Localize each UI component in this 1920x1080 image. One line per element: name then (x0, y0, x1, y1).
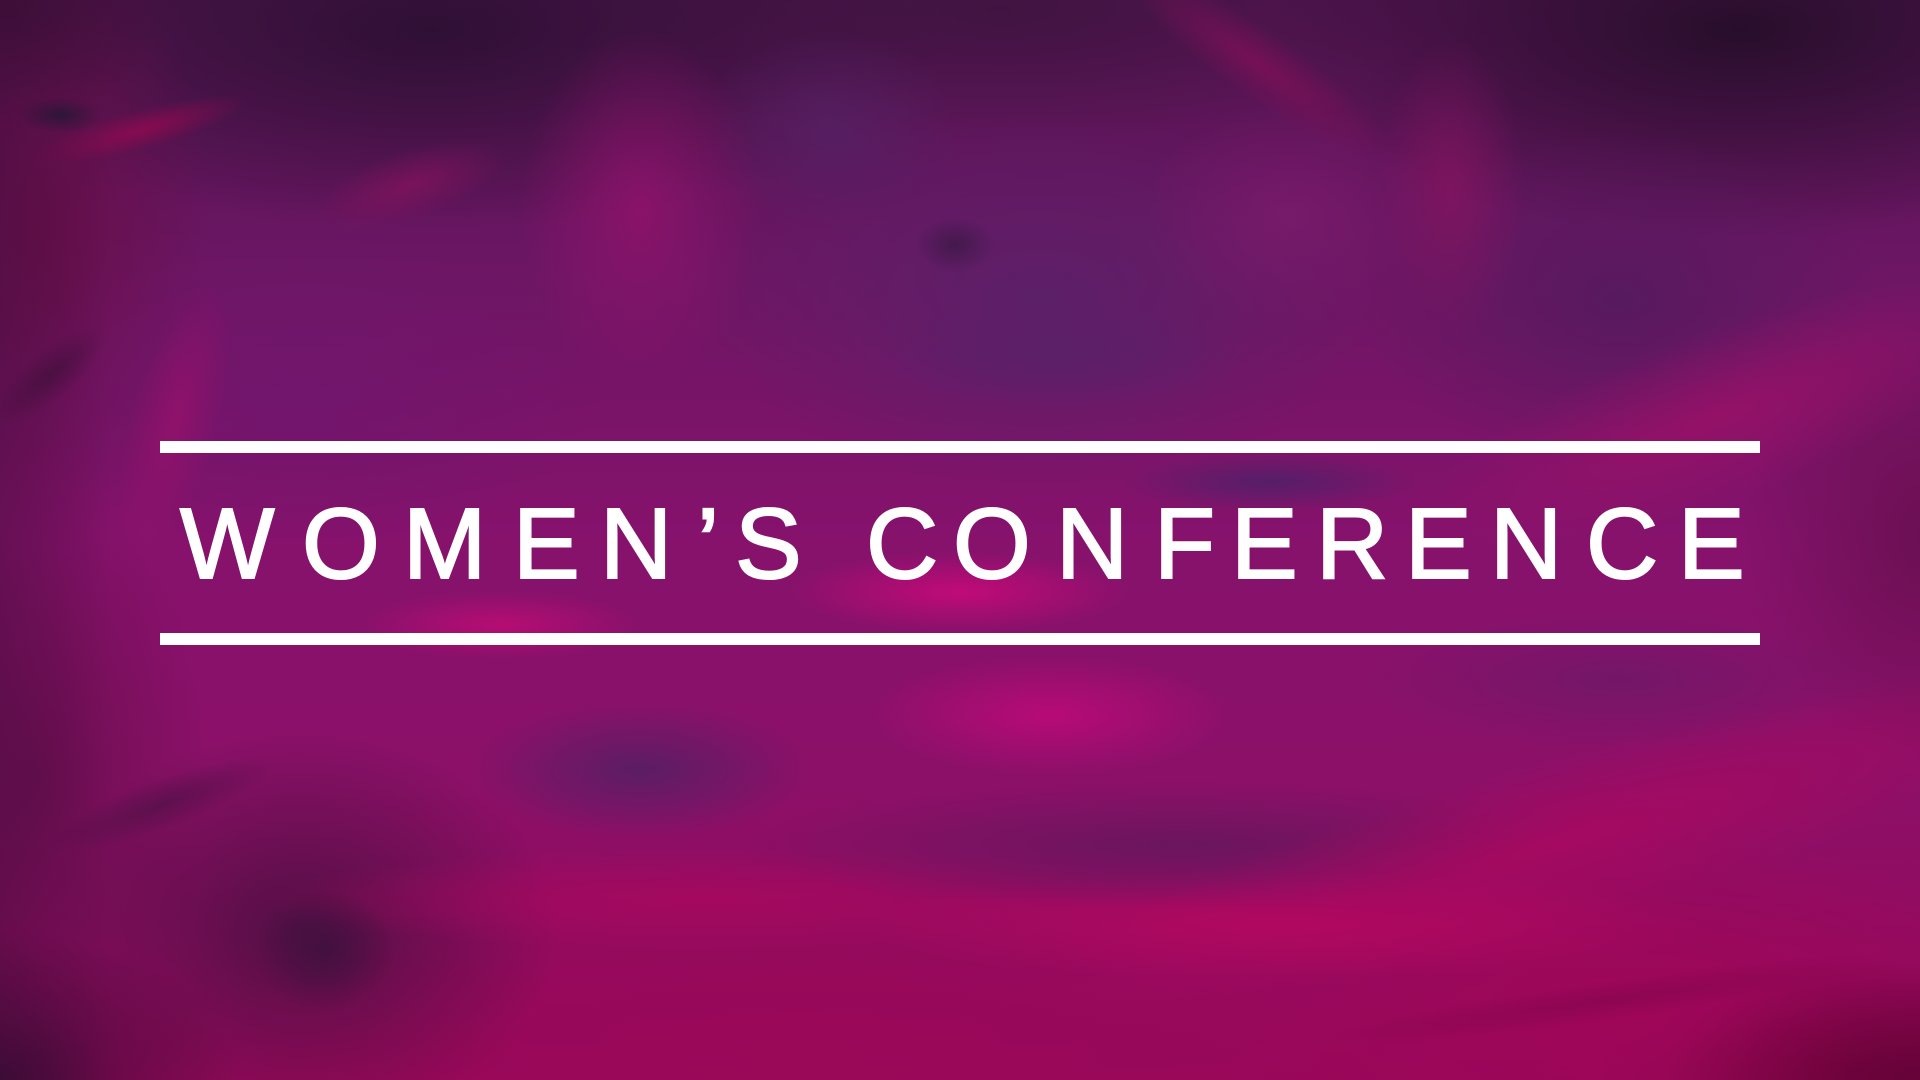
heading: Women's Conference: WOMEN’S CONFERENCE (180, 488, 1745, 600)
bottom rule (160, 633, 1760, 645)
top rule (160, 441, 1760, 453)
